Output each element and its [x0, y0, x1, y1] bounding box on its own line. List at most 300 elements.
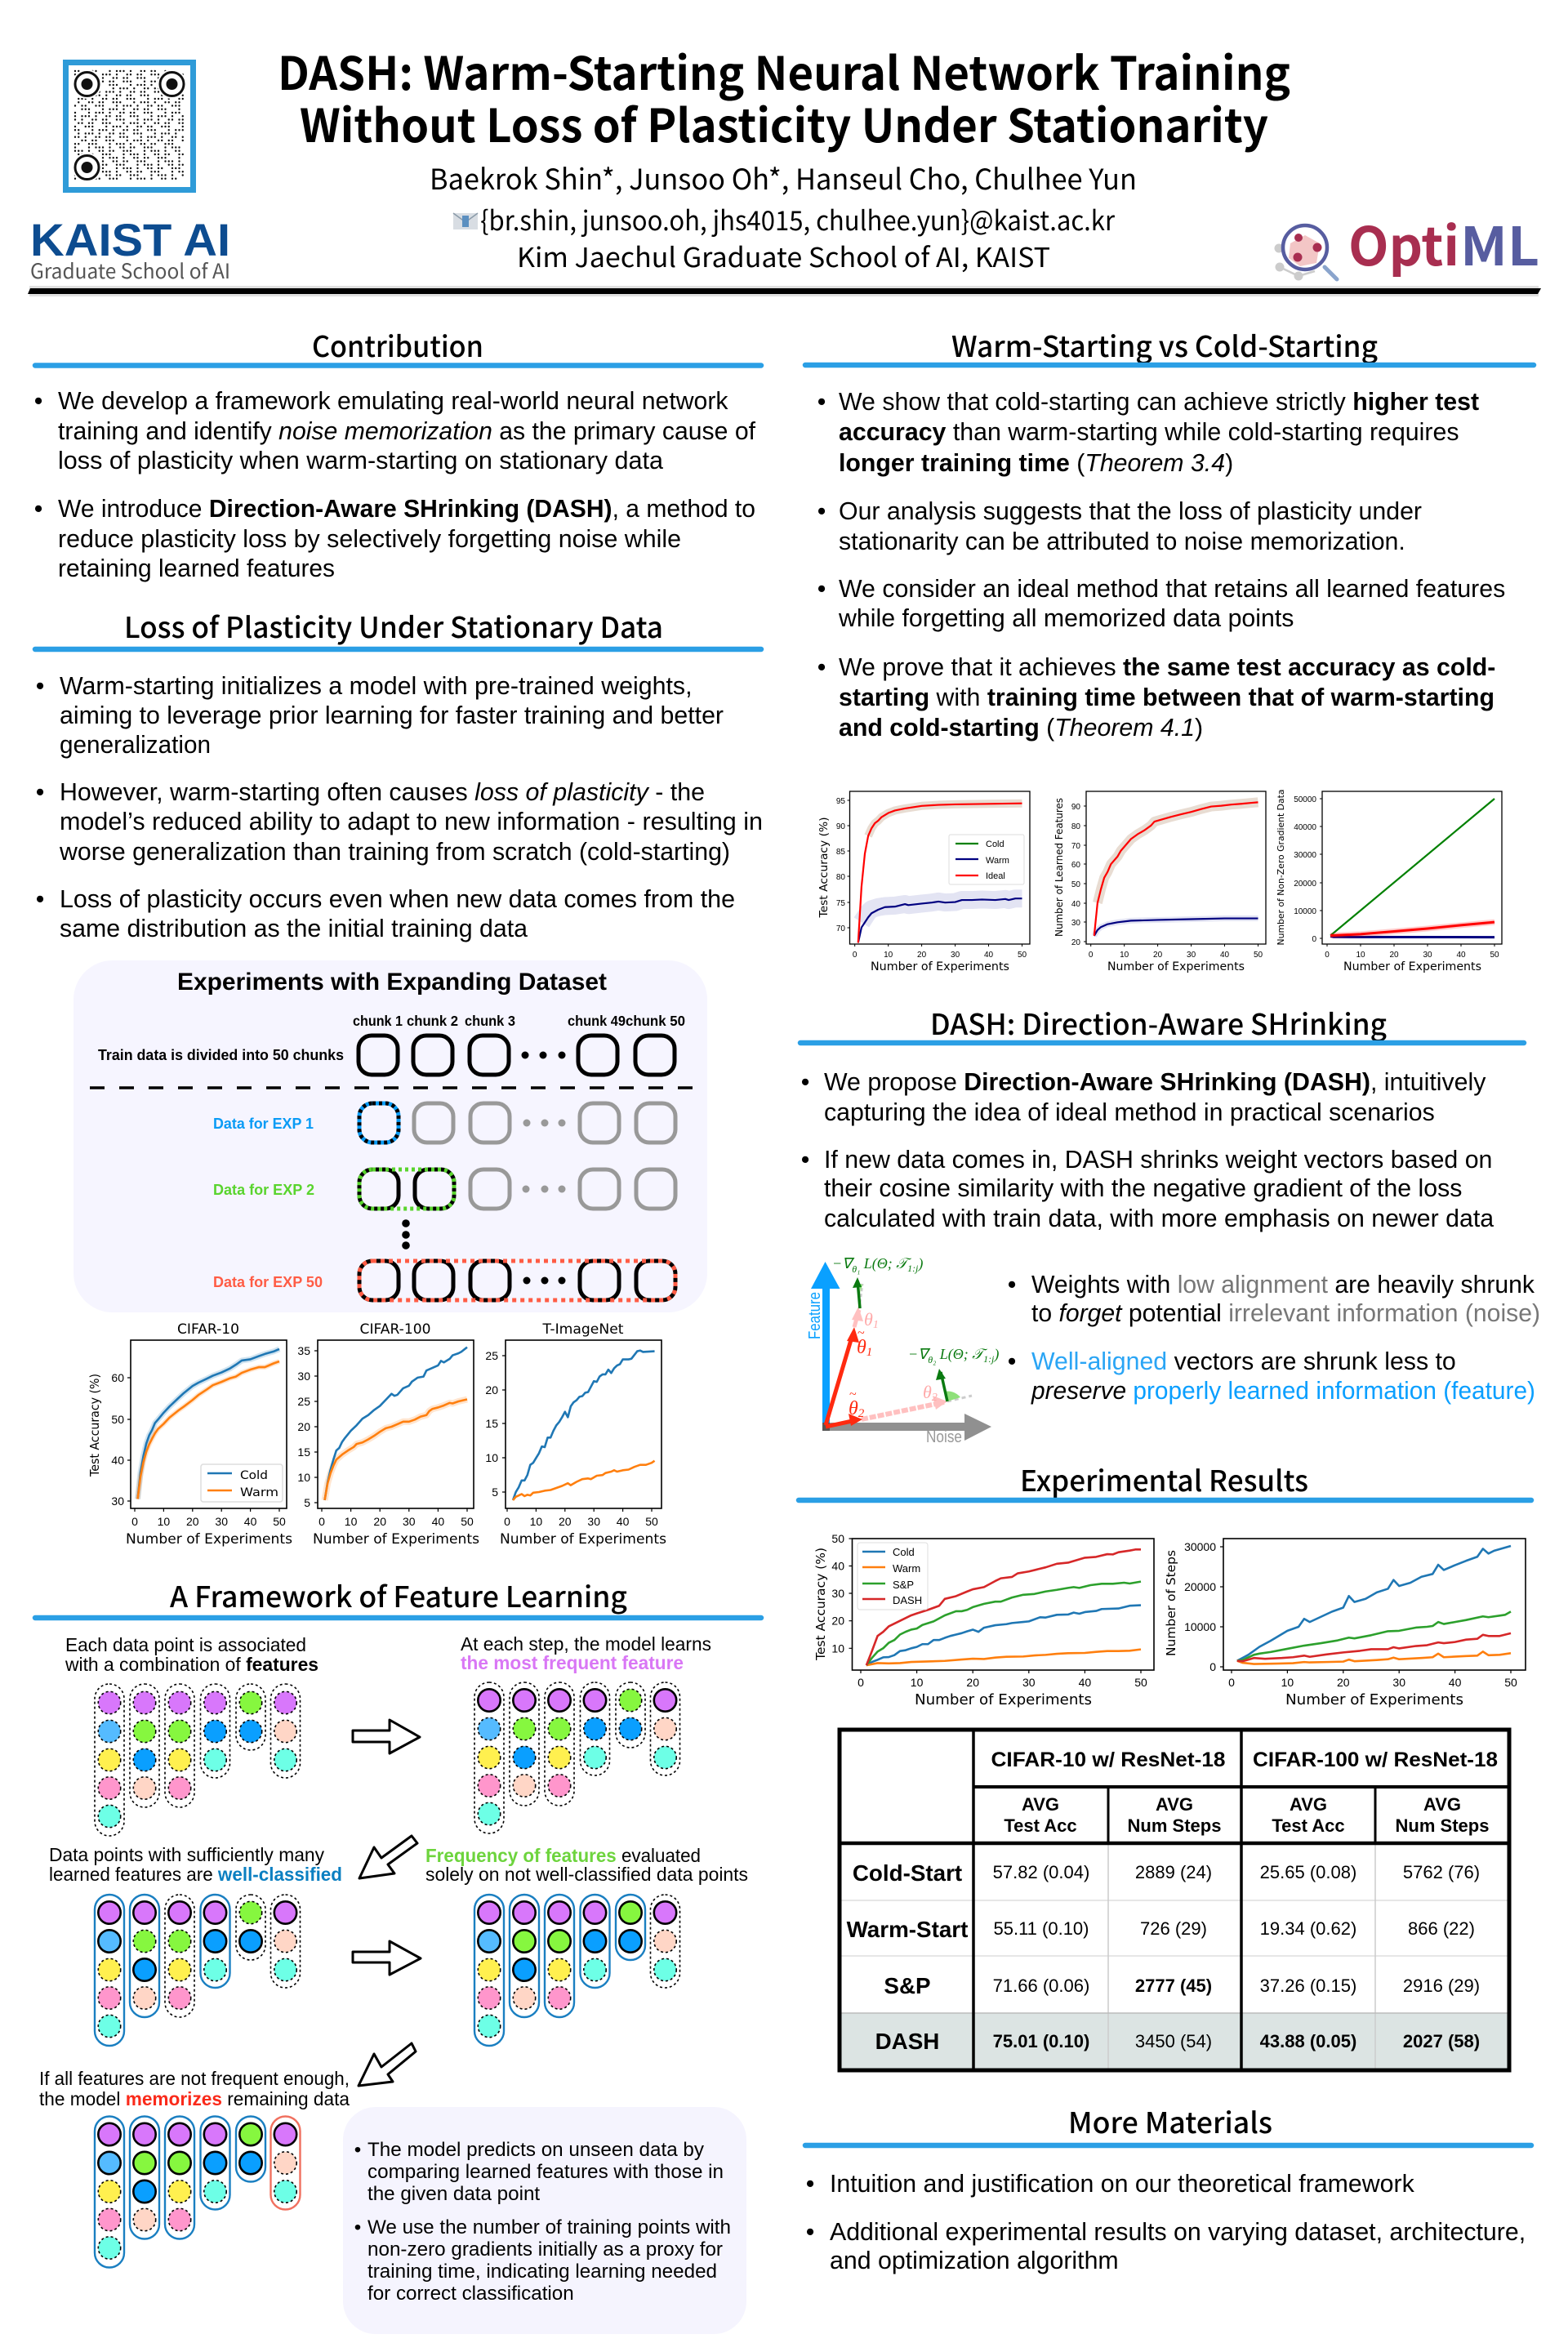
text block: • — [801, 1147, 809, 1174]
math labels: 1:j — [907, 1263, 919, 1274]
chart: number of learned features: Number of Experiments — [1107, 960, 1245, 973]
legend: DASH — [893, 1594, 922, 1606]
chart: number of learned features: Number of Learned Features — [1054, 798, 1065, 937]
caption: At each step, the model learns — [461, 1633, 711, 1655]
chart: T-ImageNet: 30 — [587, 1515, 600, 1528]
chart: number of steps by method: 0 — [1228, 1676, 1235, 1689]
QR code — [65, 62, 193, 189]
arrow right 1 — [353, 1720, 420, 1753]
chart: number of learned features: 80 — [1071, 822, 1080, 831]
title: Without Loss of Plasticity Under Stationarity — [300, 90, 1268, 156]
chart: T-ImageNet: 0 — [504, 1515, 510, 1528]
chart: T-ImageNet: Number of Experiments — [500, 1531, 666, 1548]
text block: starting with training time between that of warm-starting — [839, 684, 1494, 711]
chart: number of steps by method: 10 — [1281, 1676, 1294, 1689]
caption — [461, 1633, 711, 1673]
chart: number of learned features: 20 — [1071, 938, 1080, 947]
text block — [34, 388, 756, 582]
row: data for EXP 1: Data for EXP 1 — [213, 1116, 314, 1132]
text block: generalization — [60, 732, 211, 759]
chart: number of non-zero gradient data: 0 — [1312, 935, 1316, 944]
text block: • — [806, 2219, 814, 2246]
text block: accuracy than warm-starting while cold-starting requires — [839, 419, 1459, 446]
math labels: L(Θ; 𝒯 — [860, 1255, 911, 1272]
arrow right 2 — [353, 1941, 421, 1975]
text block: aiming to leverage prior learning for faster training and better — [60, 702, 724, 729]
chart: CIFAR-10: 40 — [111, 1454, 124, 1467]
chunk labels: chunk 49 — [568, 1013, 626, 1029]
chart: test accuracy by method: 20 — [831, 1615, 844, 1628]
chart: number of non-zero gradient data: 30 — [1423, 951, 1432, 960]
step 2: most frequent feature — [461, 1633, 711, 1833]
data columns — [95, 1684, 301, 1836]
heading: Loss of Plasticity Under Stationary Data — [124, 605, 663, 647]
chart: number of non-zero gradient data: 10000 — [1294, 907, 1316, 916]
chart: number of learned features: 20 — [1153, 951, 1163, 960]
text block: Intuition and justification on our theoretical framework — [830, 2171, 1415, 2198]
panel: model prediction note — [343, 2107, 746, 2334]
text block — [36, 673, 763, 942]
math labels: 2 — [932, 1392, 938, 1404]
text block: However, warm-starting often causes loss of plasticity - the — [60, 779, 705, 806]
legend — [201, 1464, 283, 1502]
table row: S&P: S&P — [884, 1973, 931, 1998]
text block: training and identify noise memorization as the primary cause of — [58, 418, 756, 445]
table row: DASH: 3450 (54) — [1135, 2031, 1212, 2051]
vector theta 2 — [826, 1369, 972, 1427]
math labels: 2 — [858, 1407, 865, 1420]
chart: test accuracy cold warm ideal: Number of Experiments — [871, 960, 1009, 973]
table row: DASH — [875, 2029, 1480, 2054]
text block: calculated with train data, with more emphasis on newer data — [824, 1205, 1494, 1232]
chart: CIFAR-100: 0 — [318, 1515, 325, 1528]
math labels — [832, 1255, 999, 1420]
text block: Warm-starting initializes a model with pre-trained weights, — [60, 673, 692, 700]
chart: test accuracy by method: 30 — [831, 1587, 844, 1600]
email: {br.shin, junsoo.oh, jhs4015, chulhee.yun}@kaist.ac.kr — [480, 199, 1115, 238]
chart: number of steps by method: 0 — [1209, 1660, 1216, 1673]
chart: CIFAR-100: 30 — [403, 1515, 416, 1528]
text block: stationarity can be attributed to noise memorization. — [839, 528, 1405, 555]
chart: CIFAR-100: 30 — [297, 1370, 310, 1383]
text block: their cosine similarity with the negative gradient of the loss — [824, 1175, 1462, 1202]
table headers: Num Steps — [1128, 1815, 1221, 1836]
caption: the most frequent feature — [461, 1652, 684, 1673]
chart: number of learned features: 50 — [1071, 880, 1080, 889]
arrow: feature axis — [806, 1262, 840, 1431]
affiliation: Kim Jaechul Graduate School of AI, KAIST — [517, 236, 1050, 275]
text block: Loss of plasticity occurs even when new data comes from the — [60, 886, 735, 913]
caption: solely on not well-classified data points — [425, 1864, 748, 1885]
section: Loss of Plasticity — [35, 605, 763, 942]
table row: Warm-Start: 55.11 (0.10) — [993, 1918, 1089, 1939]
caption — [39, 2068, 350, 2109]
panel: experiments with expanding dataset — [74, 960, 707, 1312]
caption — [49, 1844, 342, 1885]
DASH explanation bullets: Weights with low alignment are heavily shrunk — [1031, 1272, 1535, 1298]
chart: CIFAR-100: 15 — [297, 1446, 310, 1459]
chart: CIFAR-100: 50 — [461, 1515, 474, 1528]
chart: test accuracy cold warm ideal: 0 — [853, 951, 858, 960]
DASH explanation bullets: Well-aligned vectors are shrunk less to — [1031, 1348, 1456, 1375]
math labels: −∇ — [908, 1346, 928, 1362]
caption — [425, 1845, 748, 1885]
legend: Ideal — [986, 871, 1005, 881]
title: DASH: Warm-Starting Neural Network Training — [278, 38, 1290, 104]
step 5: memorizes — [39, 2068, 350, 2267]
chart: test accuracy cold warm ideal: 20 — [917, 951, 927, 960]
text block: capturing the idea of ideal method in practical scenarios — [824, 1099, 1435, 1126]
panel: model prediction note: for correct classification — [368, 2283, 574, 2305]
legend: Cold — [986, 840, 1004, 849]
data columns — [474, 1682, 679, 1833]
chart: test accuracy by method: Number of Experiments — [915, 1691, 1092, 1708]
math labels: θ — [849, 1398, 858, 1419]
chart: CIFAR-10 — [87, 1321, 292, 1548]
chart: number of learned features: 70 — [1071, 842, 1080, 851]
text block: and optimization algorithm — [830, 2247, 1119, 2274]
chart: test accuracy by method: 0 — [858, 1676, 864, 1689]
heading: Contribution — [312, 324, 483, 366]
math labels: θ — [923, 1382, 932, 1402]
chart: number of non-zero gradient data: 20 — [1389, 951, 1399, 960]
legend: Cold — [893, 1546, 915, 1558]
chart: test accuracy by method: 50 — [831, 1532, 844, 1545]
panel: model prediction note: the given data point — [368, 2183, 540, 2205]
row: data for EXP 50: Data for EXP 50 — [213, 1274, 323, 1290]
chart: CIFAR-10: 60 — [111, 1371, 124, 1384]
step 3: well-classified — [49, 1844, 342, 2046]
chart: test accuracy by method: 20 — [966, 1676, 979, 1689]
panel: model prediction note: • — [354, 2139, 361, 2161]
chart: T-ImageNet — [485, 1321, 666, 1548]
chart: number of steps by method: Number of Experiments — [1285, 1691, 1463, 1708]
DASH explanation bullets — [1008, 1272, 1540, 1405]
chart: CIFAR-100: 10 — [345, 1515, 358, 1528]
chart: CIFAR-10: 50 — [273, 1515, 286, 1528]
chart: number of non-zero gradient data: 40000 — [1294, 823, 1316, 832]
math labels: θ — [864, 1309, 873, 1330]
table row: Warm-Start: Warm-Start — [847, 1917, 968, 1942]
data columns — [474, 1895, 679, 2046]
table row: S&P: 2777 (45) — [1135, 1976, 1212, 1996]
chunk labels: chunk 2 — [407, 1013, 458, 1029]
results table — [840, 1730, 1509, 2070]
DASH explanation bullets: to forget potential irrelevant information (noise) — [1031, 1300, 1540, 1327]
text block — [806, 2171, 1526, 2274]
caption: If all features are not frequent enough, — [39, 2068, 350, 2089]
math labels: −∇ — [832, 1255, 852, 1272]
table headers — [991, 1748, 1498, 1836]
chart: CIFAR-100: 25 — [297, 1395, 310, 1408]
chart: test accuracy cold warm ideal: 70 — [836, 924, 845, 933]
chart: test accuracy by method: 10 — [911, 1676, 924, 1689]
chart: CIFAR-100: 20 — [373, 1515, 386, 1528]
chart: test accuracy cold warm ideal: 95 — [836, 797, 845, 806]
text block: We propose Direction-Aware SHrinking (DASH), intuitively — [824, 1069, 1486, 1096]
text block: • — [817, 498, 826, 525]
text block: Our analysis suggests that the loss of plasticity under — [839, 498, 1422, 525]
chart: CIFAR-100: 10 — [297, 1471, 310, 1484]
chart: CIFAR-10: CIFAR-10 — [177, 1321, 239, 1338]
text block: longer training time (Theorem 3.4) — [839, 450, 1233, 477]
text block: We prove that it achieves the same test accuracy as cold- — [839, 654, 1495, 681]
logo: OptiML: ML — [1460, 204, 1539, 281]
math labels: L(Θ; 𝒯 — [936, 1346, 987, 1363]
chunk labels — [353, 1013, 685, 1029]
chart: CIFAR-100: 5 — [304, 1496, 310, 1509]
chart: test accuracy by method: 10 — [831, 1642, 844, 1655]
table row: Warm-Start — [847, 1917, 1475, 1942]
text block: We consider an ideal method that retains all learned features — [839, 576, 1505, 603]
text block: • — [36, 673, 44, 700]
math labels: ) — [917, 1255, 923, 1272]
chart: CIFAR-100: Number of Experiments — [313, 1531, 479, 1548]
chart: test accuracy by method: Test Accuracy (%) — [813, 1548, 828, 1661]
chart: number of learned features — [1054, 791, 1266, 973]
row: data for EXP 1 — [213, 1103, 675, 1143]
chart: test accuracy by method: 40 — [1079, 1676, 1091, 1689]
legend: S&P — [893, 1579, 914, 1591]
logo: KAIST AI: KAIST AI — [30, 214, 230, 265]
arrow: noise axis: Noise — [926, 1428, 962, 1446]
text block: and cold-starting (Theorem 4.1) — [839, 715, 1203, 742]
text block: • — [34, 496, 42, 523]
table row: Warm-Start: 726 (29) — [1140, 1918, 1207, 1939]
caption: with a combination of features — [65, 1654, 318, 1675]
chart: CIFAR-100: 35 — [297, 1344, 310, 1357]
chart: number of steps by method: 10000 — [1184, 1620, 1216, 1633]
caption: the model memorizes remaining data — [39, 2088, 350, 2109]
heading: Warm-Starting vs Cold-Starting — [951, 324, 1378, 366]
vector theta 1 — [826, 1277, 863, 1425]
chart: number of learned features: 50 — [1254, 951, 1263, 960]
ellipsis dots — [402, 1219, 410, 1250]
chart: test accuracy cold warm ideal: 85 — [836, 848, 845, 857]
row: data for EXP 50 — [213, 1261, 675, 1300]
chart: test accuracy by method: 40 — [831, 1560, 844, 1573]
chart: number of steps by method: 20000 — [1184, 1580, 1216, 1593]
heading: Experiments with Expanding Dataset — [177, 969, 607, 996]
chart: CIFAR-100 — [297, 1321, 479, 1548]
table row: S&P: 71.66 (0.06) — [993, 1976, 1089, 1996]
chart: test accuracy cold warm ideal: 50 — [1018, 951, 1027, 960]
chart: number of steps by method — [1164, 1539, 1526, 1708]
text block — [817, 389, 1505, 742]
chart: CIFAR-10: Number of Experiments — [126, 1531, 292, 1548]
DASH explanation bullets: • — [1008, 1348, 1016, 1375]
chart: test accuracy cold warm ideal: 10 — [884, 951, 893, 960]
section: DASH — [800, 1002, 1524, 1232]
chart: T-ImageNet: 10 — [485, 1451, 498, 1464]
caption: Frequency of features evaluated — [425, 1845, 701, 1866]
chart: number of learned features: 10 — [1120, 951, 1129, 960]
table row: DASH: 2027 (58) — [1403, 2031, 1480, 2051]
table row: S&P: 2916 (29) — [1403, 1976, 1480, 1996]
table row: Cold-Start: 57.82 (0.04) — [993, 1862, 1089, 1882]
chart: T-ImageNet: 20 — [559, 1515, 572, 1528]
chart: number of learned features: 40 — [1220, 951, 1229, 960]
chart: number of steps by method: Number of Steps — [1164, 1550, 1178, 1656]
chart: CIFAR-10: 0 — [131, 1515, 138, 1528]
chart: CIFAR-10: 30 — [111, 1494, 124, 1508]
text block: • — [806, 2171, 814, 2198]
chart: T-ImageNet: 25 — [485, 1349, 498, 1362]
chart: number of non-zero gradient data: 40 — [1456, 951, 1466, 960]
chart: CIFAR-10: 30 — [215, 1515, 228, 1528]
panel: model prediction note: training time, indicating learning needed — [368, 2261, 717, 2283]
text block: We show that cold-starting can achieve strictly higher test — [839, 389, 1479, 416]
chart: T-ImageNet: T-ImageNet — [541, 1321, 624, 1338]
math labels: ~ — [849, 1388, 857, 1401]
text block: • — [36, 779, 44, 806]
chart: CIFAR-10: 20 — [186, 1515, 199, 1528]
chart: number of steps by method: 30 — [1392, 1676, 1405, 1689]
panel: model prediction note: We use the number of training points with — [368, 2216, 731, 2238]
panel: model prediction note: • — [354, 2216, 361, 2238]
chart: T-ImageNet: 15 — [485, 1417, 498, 1430]
table headers: AVG — [1423, 1794, 1461, 1815]
chart: T-ImageNet: 10 — [530, 1515, 542, 1528]
chart: test accuracy by method — [813, 1532, 1154, 1708]
section: warm vs cold — [805, 324, 1534, 742]
table headers: AVG — [1022, 1794, 1059, 1815]
table headers: Test Acc — [1004, 1815, 1077, 1836]
DASH explanation bullets: • — [1008, 1272, 1016, 1298]
legend — [949, 835, 1024, 884]
heading: More Materials — [1068, 2100, 1272, 2142]
math labels: θ₁ — [852, 1263, 860, 1275]
math labels: 1 — [873, 1319, 879, 1331]
chart: T-ImageNet: 40 — [617, 1515, 630, 1528]
legend: Warm — [986, 856, 1009, 866]
data columns — [95, 1895, 301, 2046]
chart: test accuracy cold warm ideal: 30 — [951, 951, 960, 960]
chart: number of learned features: 30 — [1187, 951, 1196, 960]
arrow: feature axis: Feature — [806, 1292, 824, 1339]
table row: Cold-Start: 2889 (24) — [1135, 1862, 1212, 1882]
chart: T-ImageNet: 50 — [645, 1515, 658, 1528]
caption — [65, 1634, 318, 1675]
chart: CIFAR-10: Test Accuracy (%) — [87, 1374, 102, 1477]
table row: S&P — [884, 1973, 1480, 1998]
chart: CIFAR-100: CIFAR-100 — [359, 1321, 431, 1338]
chart: test accuracy cold warm ideal: 40 — [984, 951, 993, 960]
panel: model prediction note: comparing learned features with those in — [368, 2161, 724, 2183]
chart: test accuracy cold warm ideal: 75 — [836, 899, 845, 908]
chart: number of steps by method: 30000 — [1184, 1540, 1216, 1553]
table row: Cold-Start: 25.65 (0.08) — [1260, 1862, 1356, 1882]
arrow: noise axis — [822, 1414, 991, 1446]
chunk labels: chunk 1 — [353, 1013, 403, 1029]
chart: number of non-zero gradient data — [1276, 789, 1502, 973]
legend — [858, 1543, 928, 1610]
section: Contribution — [34, 324, 761, 582]
header — [30, 38, 1539, 285]
table row: Cold-Start: Cold-Start — [853, 1860, 962, 1886]
chart: test accuracy by method: 50 — [1134, 1676, 1147, 1689]
math labels: 1 — [866, 1346, 872, 1359]
caption: Data points with sufficiently many — [49, 1844, 324, 1865]
math labels: θ₂ — [928, 1354, 936, 1365]
chart: T-ImageNet: 5 — [492, 1486, 498, 1499]
chart: number of learned features: 0 — [1089, 951, 1094, 960]
step 4: frequency of features — [425, 1845, 748, 2046]
chart: number of non-zero gradient data: Number of Non-Zero Gradient Data — [1276, 789, 1286, 946]
heading: Experimental Results — [1020, 1459, 1308, 1500]
chart: CIFAR-100: 20 — [297, 1420, 310, 1433]
text block: while forgetting all memorized data points — [838, 605, 1294, 632]
heading: DASH: Direction-Aware SHrinking — [930, 1002, 1387, 1044]
chart: number of learned features: 60 — [1071, 861, 1080, 870]
chart: number of learned features: 30 — [1071, 919, 1080, 928]
table row: Warm-Start: 866 (22) — [1408, 1918, 1475, 1939]
logo: KAIST AI: Graduate School of AI — [30, 256, 230, 285]
text block: retaining learned features — [58, 555, 335, 582]
table row: DASH: 75.01 (0.10) — [993, 2031, 1089, 2051]
table row: S&P: 37.26 (0.15) — [1260, 1976, 1356, 1996]
legend: Warm — [240, 1486, 278, 1499]
text block: • — [817, 389, 826, 416]
chart: test accuracy by method: 30 — [1022, 1676, 1036, 1689]
train data row — [98, 1036, 675, 1075]
chart: number of learned features: 90 — [1071, 803, 1080, 812]
chart: CIFAR-10: 40 — [244, 1515, 257, 1528]
chart: number of steps by method: 40 — [1449, 1676, 1462, 1689]
chart: number of steps by method: 20 — [1337, 1676, 1350, 1689]
table row: Cold-Start — [853, 1860, 1480, 1886]
heading: A Framework of Feature Learning — [170, 1575, 627, 1616]
chart: number of non-zero gradient data: 10 — [1356, 951, 1365, 960]
math labels: ) — [993, 1346, 999, 1363]
text block: • — [34, 388, 42, 415]
table headers: CIFAR-100 w/ ResNet-18 — [1253, 1748, 1498, 1771]
chart: test accuracy cold warm ideal: 90 — [836, 822, 845, 831]
math labels: ~ — [858, 1326, 865, 1340]
chunk labels: chunk 3 — [465, 1013, 515, 1029]
table headers: AVG — [1156, 1794, 1193, 1815]
math labels: θ — [857, 1337, 866, 1358]
arrow diagonal 1 — [359, 1836, 417, 1878]
section: more materials — [805, 2100, 1531, 2274]
chart: number of non-zero gradient data: 50000 — [1294, 795, 1316, 804]
panel: model prediction note: non-zero gradients initially as a proxy for — [368, 2238, 723, 2261]
text block: • — [801, 1069, 809, 1096]
table headers: CIFAR-10 w/ ResNet-18 — [991, 1748, 1226, 1771]
DASH explanation bullets: preserve properly learned information (feature) — [1031, 1378, 1535, 1405]
text block: We develop a framework emulating real-world neural network — [58, 388, 728, 415]
chart: number of non-zero gradient data: Number of Experiments — [1343, 960, 1481, 973]
chart: test accuracy cold warm ideal: 80 — [836, 873, 845, 882]
table row: Warm-Start: 19.34 (0.62) — [1260, 1918, 1356, 1939]
arrow diagonal 2 — [359, 2043, 416, 2086]
text block: reduce plasticity loss by selectively forgetting noise while — [58, 526, 681, 553]
chart: CIFAR-100: 40 — [432, 1515, 444, 1528]
table headers: Num Steps — [1396, 1815, 1489, 1836]
chart: number of non-zero gradient data: 50 — [1490, 951, 1499, 960]
diagram: feature and noise directions — [806, 1255, 999, 1446]
text block: • — [817, 654, 826, 681]
text block: • — [36, 886, 44, 913]
data columns — [95, 2117, 301, 2267]
panel: model prediction note: The model predicts on unseen data by — [368, 2139, 705, 2161]
table row: DASH: 43.88 (0.05) — [1260, 2031, 1356, 2051]
text block: We introduce Direction-Aware SHrinking (DASH), a method to — [58, 496, 755, 523]
chunk labels: chunk 50 — [626, 1013, 685, 1029]
text block — [801, 1069, 1494, 1232]
chart: number of learned features: 40 — [1071, 900, 1080, 909]
logo: OptiML: Opti — [1348, 204, 1459, 281]
